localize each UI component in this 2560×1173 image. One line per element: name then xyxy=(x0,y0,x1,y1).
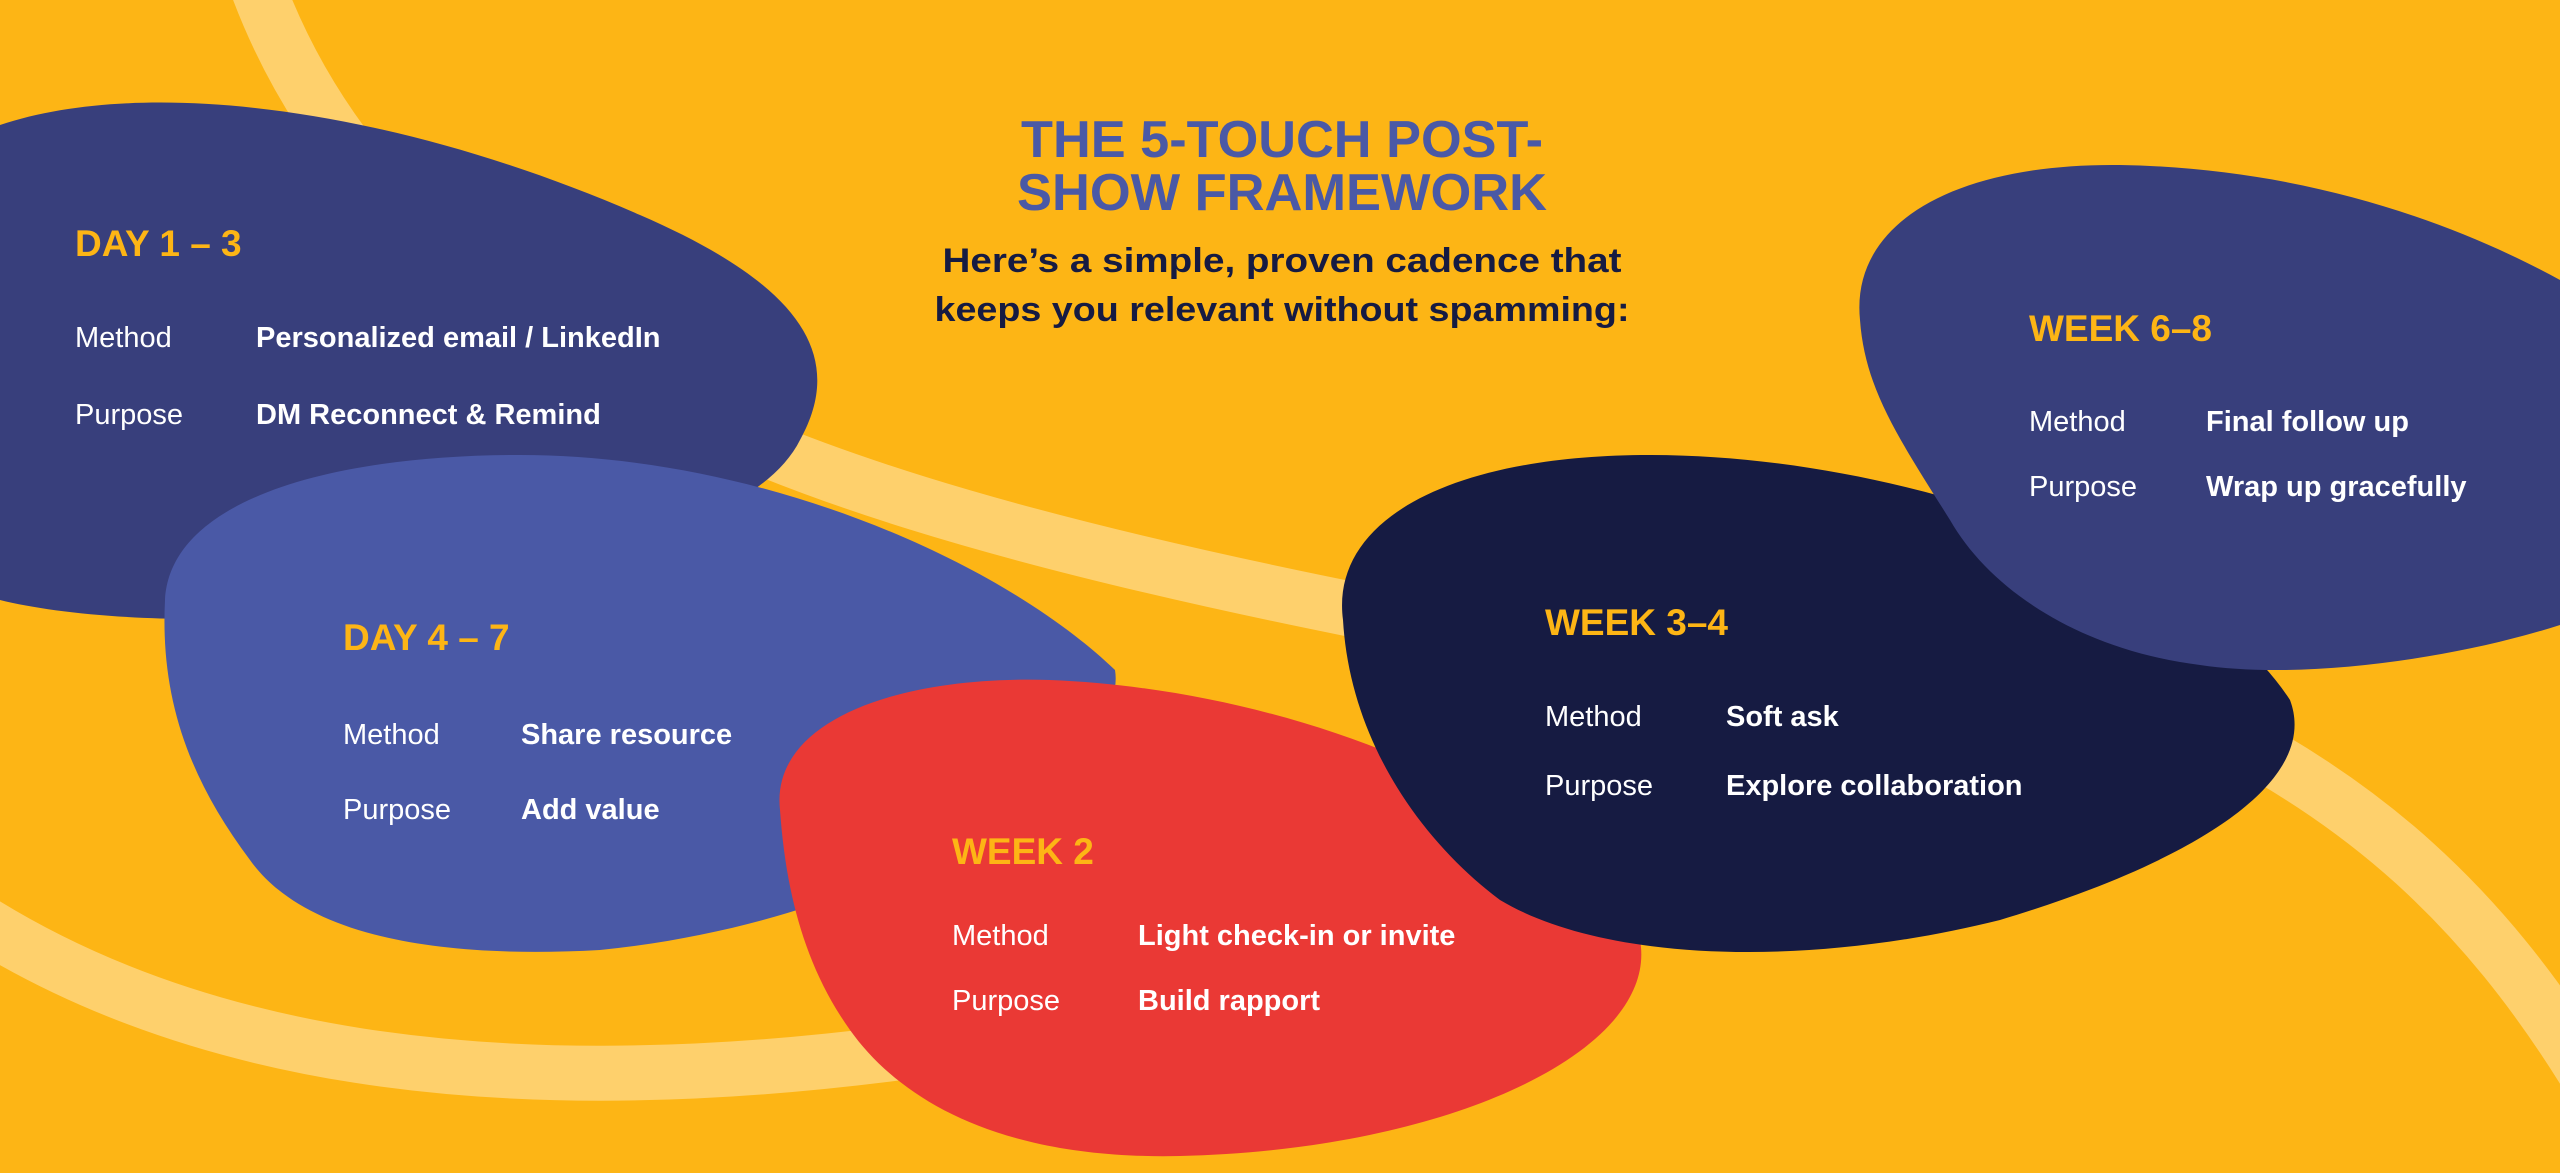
text: week 3-4 method: Soft ask xyxy=(1726,701,1840,733)
text: day 1-3 purpose: Purpose xyxy=(75,399,183,431)
text: week 3-4 purpose: Explore collaboration xyxy=(1726,770,2022,802)
panel: day 1-3 xyxy=(0,103,817,619)
text: week 6-8 method: Method xyxy=(2029,406,2126,438)
text: week 6-8 purpose: Wrap up gracefully xyxy=(2206,471,2467,503)
heading: day 4-7: DAY 4 – 7 xyxy=(343,617,510,658)
text: day 4-7 method: Share resource xyxy=(521,719,732,751)
heading: week 6-8: WEEK 6–8 xyxy=(2029,308,2212,349)
panel: week 6-8 xyxy=(1859,165,2560,670)
text: day 1-3 method: Personalized email / LinkedIn xyxy=(256,322,661,354)
subtitle xyxy=(934,242,1630,329)
text: week 3-4 method: Method xyxy=(1545,701,1642,733)
panel: week 3-4 xyxy=(1342,455,2295,952)
text: week 2 purpose: Build rapport xyxy=(1138,985,1320,1017)
subtitle: Here’s a simple, proven cadence that xyxy=(942,242,1622,280)
subtitle: keeps you relevant without spamming: xyxy=(934,291,1630,329)
text: day 4-7 purpose: Add value xyxy=(521,794,660,826)
text: week 3-4 purpose: Purpose xyxy=(1545,770,1653,802)
heading: week 2: WEEK 2 xyxy=(952,831,1094,872)
heading: week 3-4: WEEK 3–4 xyxy=(1545,602,1728,643)
text: day 1-3 method: Method xyxy=(75,322,172,354)
title: SHOW FRAMEWORK xyxy=(1017,164,1547,222)
text: week 2 purpose: Purpose xyxy=(952,985,1060,1017)
text: day 4-7 method: Method xyxy=(343,719,440,751)
panel: week 2 xyxy=(779,680,1641,1156)
text: week 2 method: Light check-in or invite xyxy=(1138,920,1455,952)
text: day 1-3 purpose: DM Reconnect & Remind xyxy=(256,399,601,431)
text: week 6-8 method: Final follow up xyxy=(2206,406,2409,438)
title: THE 5-TOUCH POST- xyxy=(1021,111,1543,169)
text: week 2 method: Method xyxy=(952,920,1049,952)
panel: day 4-7 xyxy=(164,455,1116,952)
text: week 6-8 purpose: Purpose xyxy=(2029,471,2137,503)
title xyxy=(1017,111,1547,222)
text: day 4-7 purpose: Purpose xyxy=(343,794,451,826)
heading: day 1-3: DAY 1 – 3 xyxy=(75,223,242,264)
